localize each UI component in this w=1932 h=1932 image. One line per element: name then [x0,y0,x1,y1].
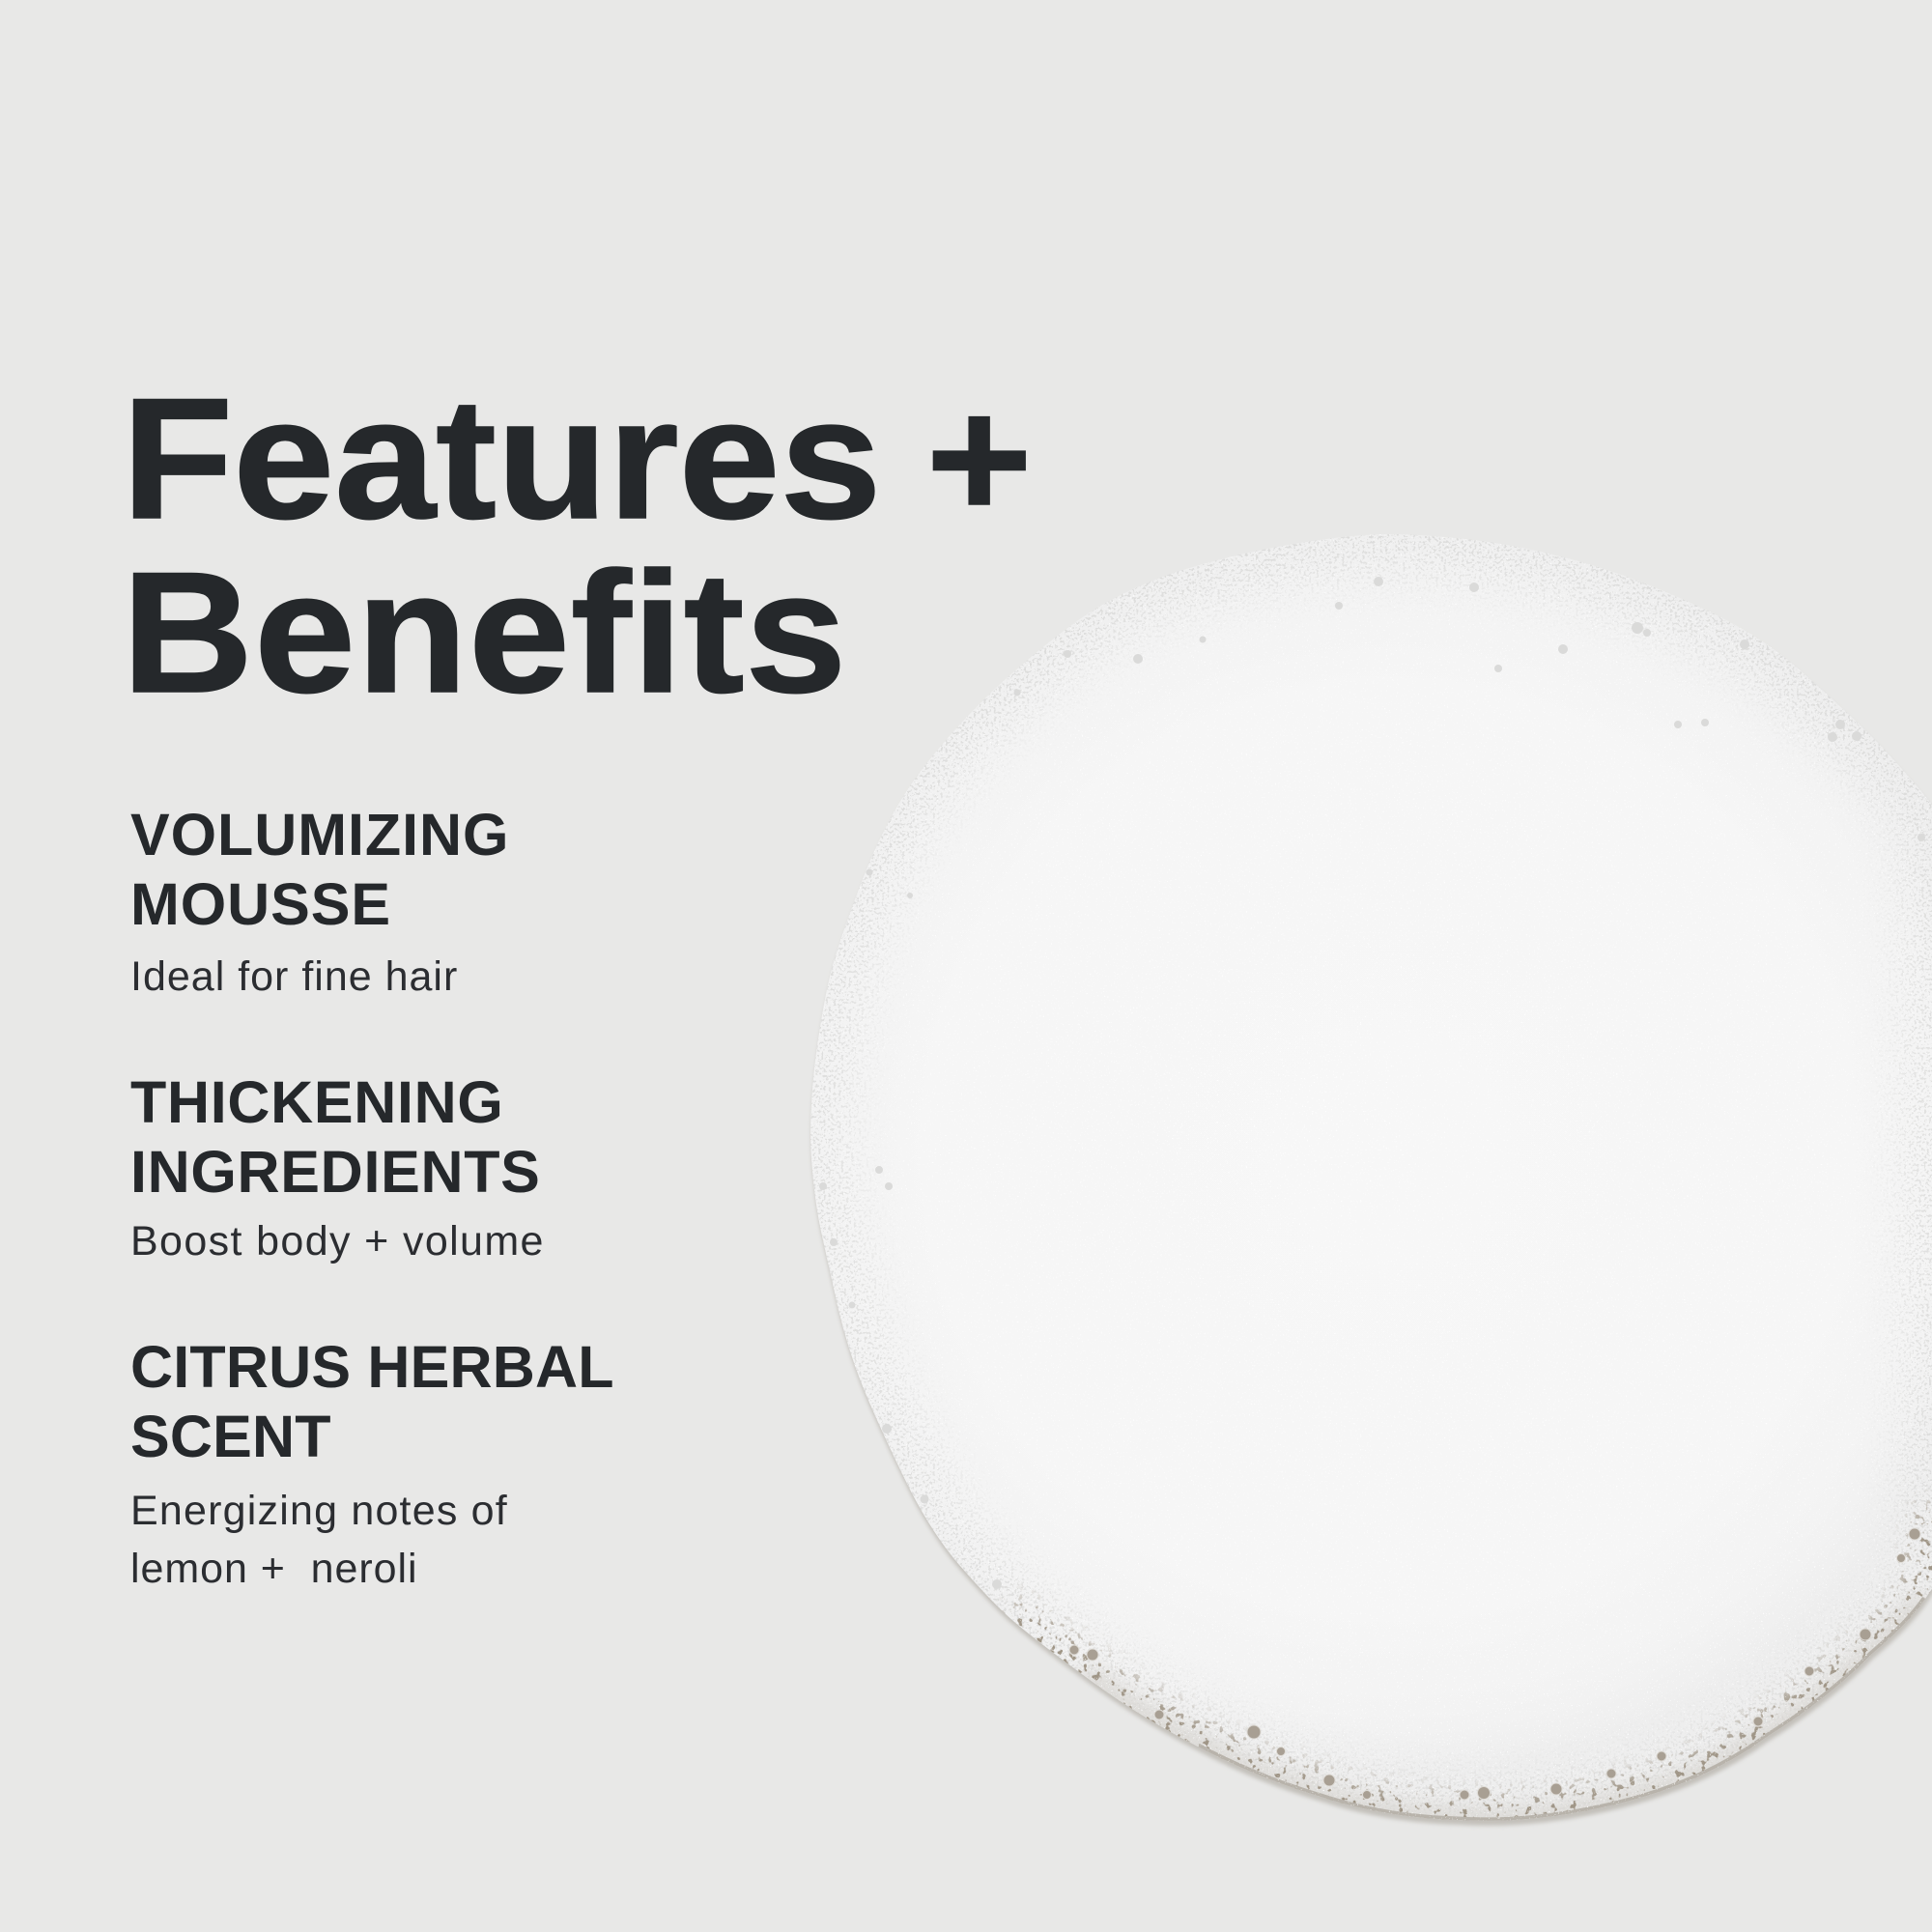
heading: thickening ingredients [130,1069,541,1205]
feature: volumizing mousse [130,802,509,1000]
heading: thickening ingredients: THICKENING [130,1069,504,1135]
thin wet edge [1198,1599,1925,1821]
title: Benefits [122,536,847,728]
foam shadow [811,539,1932,1826]
large bubbles, lower rim [1069,1528,1920,1800]
grey bubbles, upper and left rim [819,577,1925,1589]
fine grey foam texture on rim [792,522,1932,1835]
heading: volumizing mousse: VOLUMIZING [130,802,509,867]
text: energizing notes: lemon + neroli [130,1546,417,1592]
foam body [792,522,1932,1835]
bubbly lower rim tint [1082,1599,1925,1821]
heading: citrus herbal scent [130,1334,614,1469]
heading: citrus herbal scent: SCENT [130,1404,331,1469]
feature: thickening ingredients [130,1069,545,1264]
feature: citrus herbal scent [130,1334,614,1592]
title: Features + [122,362,1033,554]
heading: thickening ingredients: INGREDIENTS [130,1139,541,1205]
heading: volumizing mousse: MOUSSE [130,871,391,937]
heading: volumizing mousse [130,802,509,937]
title [122,362,1033,728]
sparkle glint [1063,869,1546,1352]
brown bubble texture on lower rim [999,1493,1932,1821]
white sparkle texture [792,522,1932,1835]
heading: citrus herbal scent: CITRUS HERBAL [130,1334,614,1400]
foam swatch [810,534,1932,1828]
text: energizing notes: Energizing notes of [130,1488,508,1534]
text: boost body + volume: Boost body + volume [130,1218,545,1264]
text: ideal for fine hair: Ideal for fine hair [130,953,458,1000]
text: energizing notes [130,1488,508,1592]
